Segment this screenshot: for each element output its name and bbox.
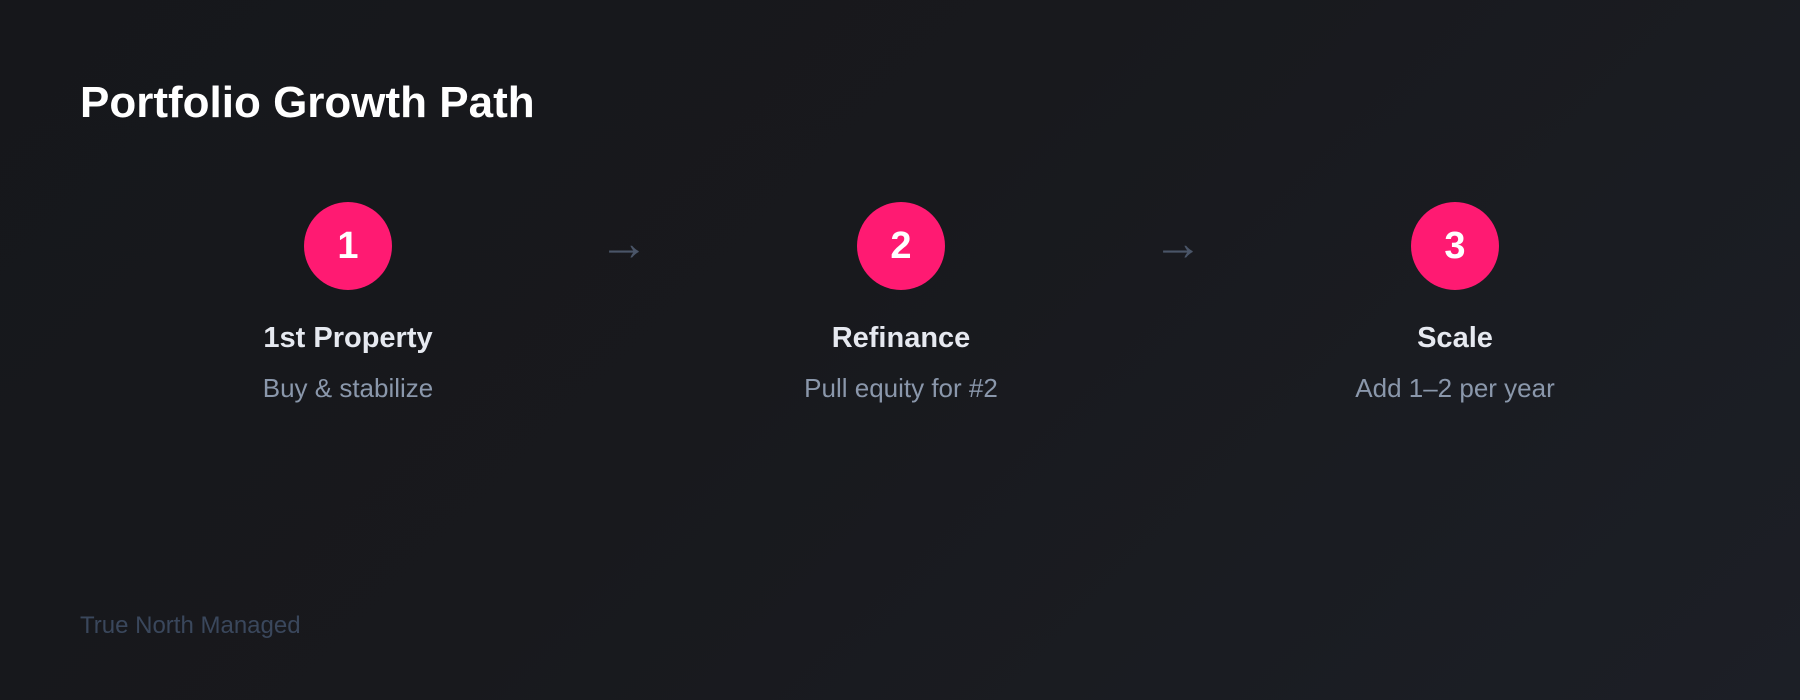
heading 2: Refinance <box>832 322 970 354</box>
arrow 2: → <box>1153 215 1203 271</box>
footer: True North Managed <box>80 612 301 639</box>
circle 3 <box>1411 202 1499 290</box>
circle 1: 1 <box>337 225 359 267</box>
circle 2: 2 <box>890 225 912 267</box>
circle 3: 3 <box>1444 225 1466 267</box>
desc 2: Pull equity for #2 <box>804 373 998 403</box>
arrow 1: → <box>599 215 649 271</box>
step 2 <box>804 202 998 403</box>
desc 3: Add 1–2 per year <box>1355 373 1555 403</box>
step 1 <box>263 202 433 403</box>
circle 2 <box>857 202 945 290</box>
desc 1: Buy & stabilize <box>263 373 433 403</box>
step 3 <box>1355 202 1555 403</box>
circle 1 <box>304 202 392 290</box>
heading 3: Scale <box>1417 322 1493 354</box>
title: Portfolio Growth Path <box>80 78 535 127</box>
heading 1: 1st Property <box>263 322 433 354</box>
